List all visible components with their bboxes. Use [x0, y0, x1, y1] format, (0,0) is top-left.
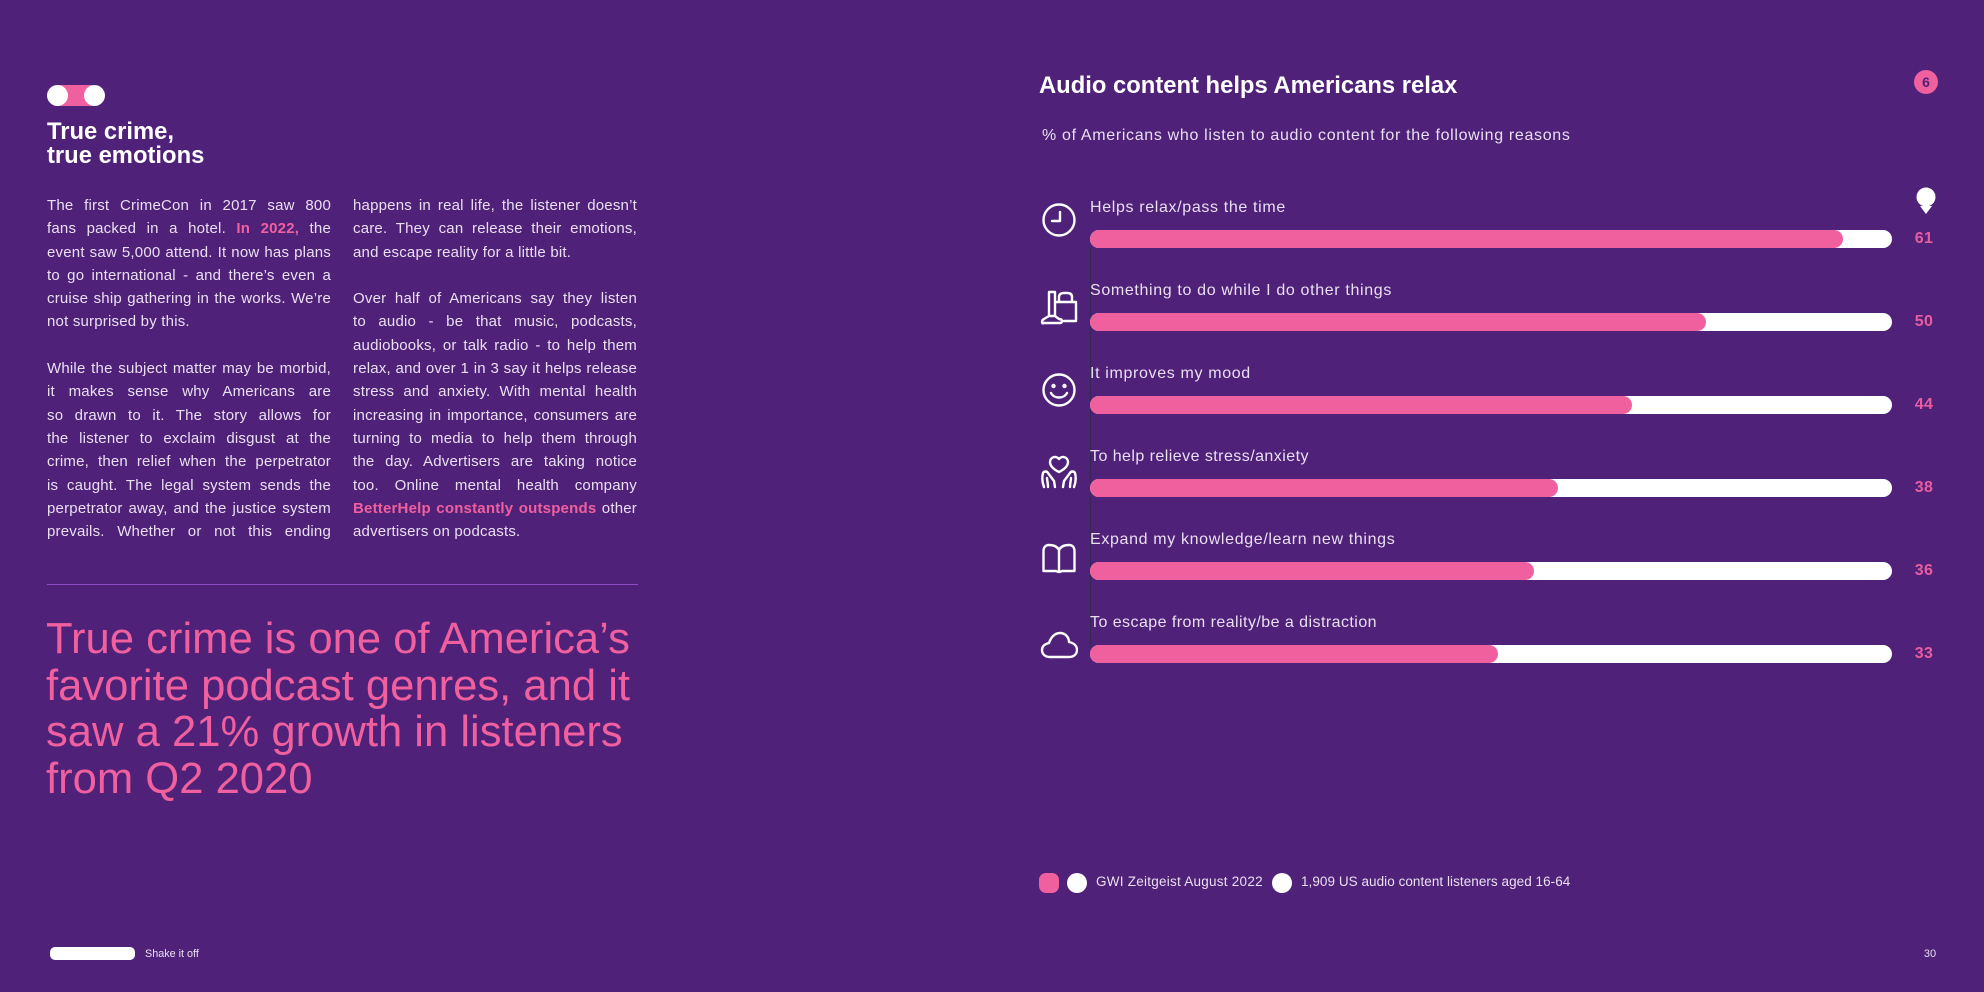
heading: True crime, true emotions: true emotions [47, 142, 204, 169]
footer section name: Shake it off [145, 948, 199, 960]
text block: right column: and escape reality for a little bit. [353, 244, 571, 261]
source text: GWI Zeitgeist August 2022 [1096, 874, 1263, 889]
text block: left column: While the subject matter may be morbid, [47, 360, 331, 377]
bar chart: It improves my mood [1090, 365, 1251, 382]
text block: left column: crime, then relief when the perpetrator [47, 453, 331, 470]
text block: right column: care. They can release their emotions, [353, 220, 637, 237]
bar chart: 50 [1915, 313, 1933, 330]
icon: source white [1067, 873, 1087, 893]
text block: left column: is caught. The legal system sends the [47, 477, 331, 494]
heading: True crime, true emotions [47, 118, 204, 169]
bar chart: To escape from reality/be a distraction [1090, 614, 1377, 631]
text block: right column: relax, and over 1 in 3 say it helps release [353, 360, 637, 377]
bar chart: 61 [1915, 230, 1933, 247]
chart subtitle: % of Americans who listen to audio content for the following reasons [1042, 127, 1570, 144]
badge: section number 6: 6 [1922, 74, 1930, 90]
text block: left column: it makes sense why Americans are [47, 383, 331, 400]
bar chart: 33 [1915, 645, 1933, 662]
text block: left column: The first CrimeCon in 2017 saw 800 [47, 197, 331, 214]
heading: True crime, true emotions: True crime, [47, 118, 174, 145]
text block: right column [353, 197, 637, 540]
text block: right column: to audio - be that music, podcasts, [353, 313, 637, 330]
pull quote [46, 615, 630, 803]
text block: left column [47, 197, 331, 540]
footer pill [50, 947, 135, 960]
text block: right column: Over half of Americans say they listen [353, 290, 637, 307]
bar chart: Something to do while I do other things [1090, 282, 1392, 299]
text block: left column: not surprised by this. [47, 313, 190, 330]
bar chart: To help relieve stress/anxiety [1090, 448, 1309, 465]
text block: right column: happens in real life, the listener doesn’t [353, 197, 637, 214]
text block: left column: event saw 5,000 attend. It now has plans [47, 244, 331, 261]
icon: pin marker [1916, 188, 1936, 214]
pull quote: True crime is one of America’s [46, 615, 630, 663]
bar chart [1040, 199, 1933, 663]
text block: right column: stress and anxiety. With mental health [353, 383, 637, 400]
row: To help relieve stress/anxiety [1041, 448, 1933, 497]
pull quote: from Q2 2020 [46, 755, 313, 803]
bar chart: 38 [1915, 479, 1933, 496]
row: It improves my mood [1042, 365, 1933, 414]
chart title: Audio content helps Americans relax [1039, 72, 1457, 99]
row: Something to do while I do other things [1040, 282, 1933, 331]
text block: left column: the listener to exclaim disgust at the [47, 430, 331, 447]
text block: left column: perpetrator away, and the justice system [47, 500, 331, 517]
text block: left column: to go international - and there’s even a [47, 267, 331, 284]
row: To escape from reality/be a distraction [1040, 614, 1933, 663]
text block: right column: turning to media to help them through [353, 430, 637, 447]
base text: 1,909 US audio content listeners aged 16-64 [1301, 874, 1570, 889]
text block: right column: too. Online mental health company [353, 477, 637, 494]
text block: left column: cruise ship gathering in the works. We’re [47, 290, 331, 307]
icon: toggle [47, 85, 105, 106]
text block: right column: audiobooks, or talk radio - to help them [353, 337, 637, 354]
text block: left column: fans packed in a hotel. In 2022, the [47, 220, 331, 237]
text block: right column: BetterHelp constantly outspends other [353, 500, 637, 517]
bar chart: Helps relax/pass the time [1090, 199, 1286, 216]
row: Expand my knowledge/learn new things [1042, 531, 1933, 580]
bar chart: 36 [1915, 562, 1933, 579]
icon: source pink [1039, 873, 1059, 893]
icon: base white [1272, 873, 1292, 893]
badge: section number 6 [1914, 70, 1938, 94]
page number: 30 [1924, 948, 1936, 960]
text block: left column: prevails. Whether or not this ending [47, 523, 331, 540]
text block: right column: advertisers on podcasts. [353, 523, 520, 540]
row: Helps relax/pass the time [1042, 199, 1933, 248]
pull quote: saw a 21% growth in listeners [46, 708, 623, 756]
bar chart: Expand my knowledge/learn new things [1090, 531, 1395, 548]
pull quote: favorite podcast genres, and it [46, 662, 630, 710]
footer: source icons and text [1039, 873, 1570, 893]
bar chart: 44 [1915, 396, 1933, 413]
text block: right column: increasing in importance, consumers are [353, 407, 637, 424]
text block: left column: so drawn to it. The story allows for [47, 407, 331, 424]
text block: right column: the day. Advertisers are taking notice [353, 453, 637, 470]
